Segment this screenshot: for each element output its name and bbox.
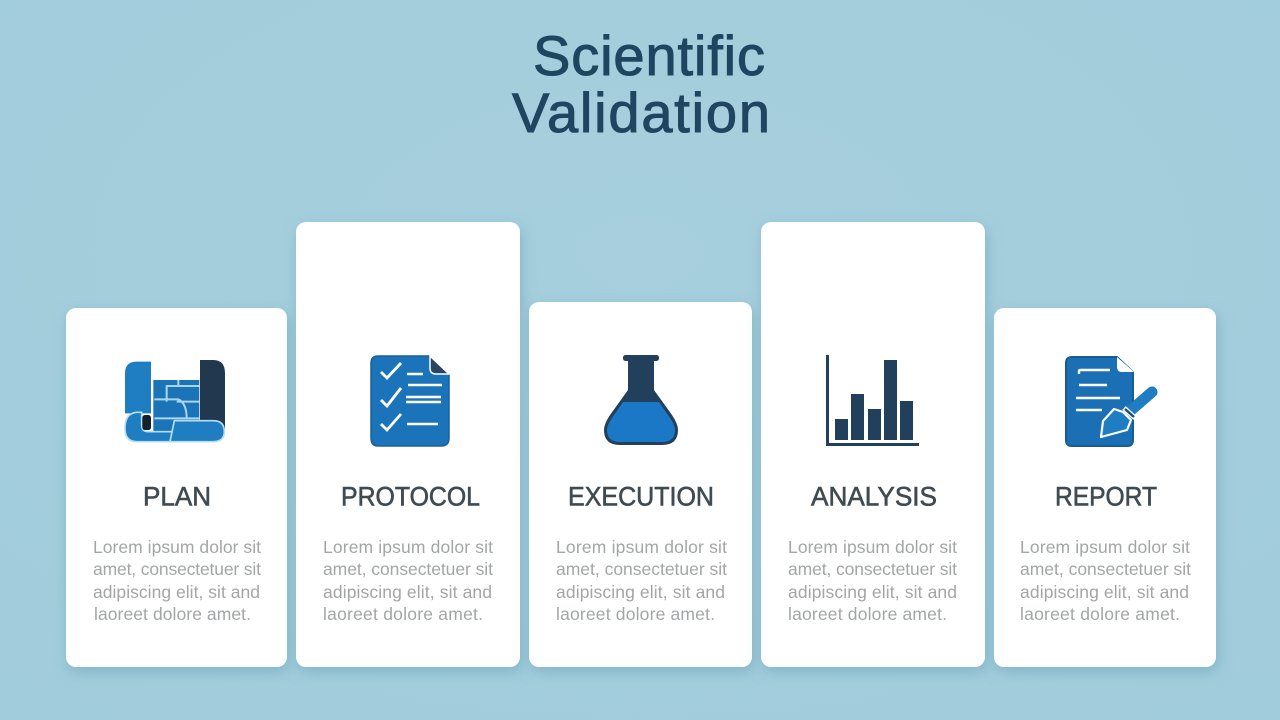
text: analysis description: laoreet dolore amet. [788, 604, 947, 624]
text: execution description: adipiscing elit, sit and [556, 582, 725, 602]
text: protocol description: adipiscing elit, sit and [323, 582, 492, 602]
panel: plan [66, 308, 287, 667]
heading: protocol: PROTOCOL [341, 482, 480, 512]
panel: protocol [296, 222, 520, 667]
text: execution description: amet, consectetuer sit [556, 559, 727, 579]
heading: plan: PLAN [143, 482, 211, 512]
icon: blueprint map [125, 360, 225, 442]
title: Validation [512, 81, 770, 144]
heading: execution: EXECUTION [568, 482, 714, 512]
text: analysis description: Lorem ipsum dolor sit [788, 537, 957, 557]
text: report description: laoreet dolore amet. [1020, 604, 1180, 624]
text: plan description: laoreet dolore amet. [94, 604, 251, 624]
text: plan description [93, 537, 261, 624]
title [512, 24, 770, 144]
heading: report: REPORT [1055, 482, 1157, 512]
text: protocol description: Lorem ipsum dolor sit [323, 537, 493, 557]
icon: report document with brush [1066, 357, 1152, 446]
text: analysis description: amet, consectetuer sit [788, 559, 957, 579]
text: report description: adipiscing elit, sit and [1020, 582, 1189, 602]
text: analysis description [788, 537, 957, 624]
panel: analysis [761, 222, 985, 667]
text: report description [1020, 537, 1191, 624]
text: report description: amet, consectetuer sit [1020, 559, 1191, 579]
text: protocol description: laoreet dolore amet. [323, 604, 483, 624]
icon: checklist document [371, 356, 449, 446]
text: plan description: amet, consectetuer sit [93, 559, 261, 579]
text: protocol description [323, 537, 493, 624]
text: execution description: Lorem ipsum dolor sit [556, 537, 727, 557]
title: Scientific [533, 24, 765, 87]
text: plan description: adipiscing elit, sit and [93, 582, 260, 602]
panel: execution [529, 302, 752, 667]
icon: bar chart [826, 355, 919, 446]
heading: analysis: ANALYSIS [811, 482, 937, 512]
text: report description: Lorem ipsum dolor sit [1020, 537, 1190, 557]
text: protocol description: amet, consectetuer sit [323, 559, 493, 579]
text: analysis description: adipiscing elit, sit and [788, 582, 957, 602]
text: execution description: laoreet dolore amet. [556, 604, 715, 624]
icon: flask [604, 355, 678, 445]
text: execution description [556, 537, 727, 624]
panel: report [994, 308, 1216, 667]
text: plan description: Lorem ipsum dolor sit [93, 537, 261, 557]
